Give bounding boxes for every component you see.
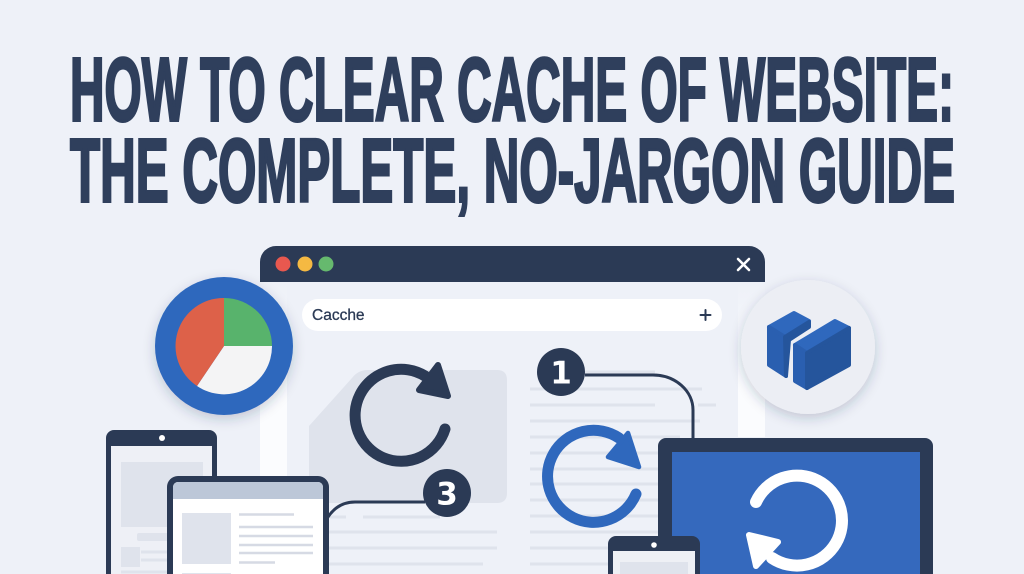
icon: storage blocks xyxy=(769,313,849,388)
title xyxy=(70,40,955,222)
pie chart badge xyxy=(155,277,293,415)
front tablet xyxy=(167,476,329,574)
left tablet xyxy=(106,430,217,574)
monitor screen xyxy=(672,452,920,574)
icon: dark reload arrow xyxy=(355,365,448,461)
connector line from step 3 xyxy=(328,502,425,517)
tablet text lines xyxy=(239,514,313,562)
address bar xyxy=(302,299,722,331)
step 1 badge xyxy=(537,348,585,396)
monitor xyxy=(658,438,933,574)
tablet header xyxy=(173,482,323,499)
blocks badge xyxy=(741,280,875,414)
browser side strips xyxy=(260,282,765,482)
small phone xyxy=(608,536,700,574)
tablet image block xyxy=(182,513,231,564)
step 3 badge: 3 xyxy=(436,476,458,512)
badge disc xyxy=(741,280,875,414)
address bar: Cacche xyxy=(312,307,365,324)
badge ring xyxy=(155,277,293,415)
tablet frame xyxy=(167,476,329,574)
monitor frame xyxy=(658,438,933,574)
pie slices xyxy=(176,298,272,394)
window buttons xyxy=(276,256,334,272)
icon: blue reload arrow xyxy=(548,430,639,522)
close icon xyxy=(738,259,749,270)
browser window xyxy=(260,246,765,482)
connector line from step 1 xyxy=(585,375,693,440)
text lines under the grey card xyxy=(328,517,497,564)
article text lines xyxy=(530,372,716,564)
step 3 badge xyxy=(423,469,471,517)
step 1 badge: 1 xyxy=(550,356,572,392)
browser title bar xyxy=(260,246,765,282)
grey card with reload icon xyxy=(309,365,507,503)
icon: white reload arrow xyxy=(749,476,842,566)
